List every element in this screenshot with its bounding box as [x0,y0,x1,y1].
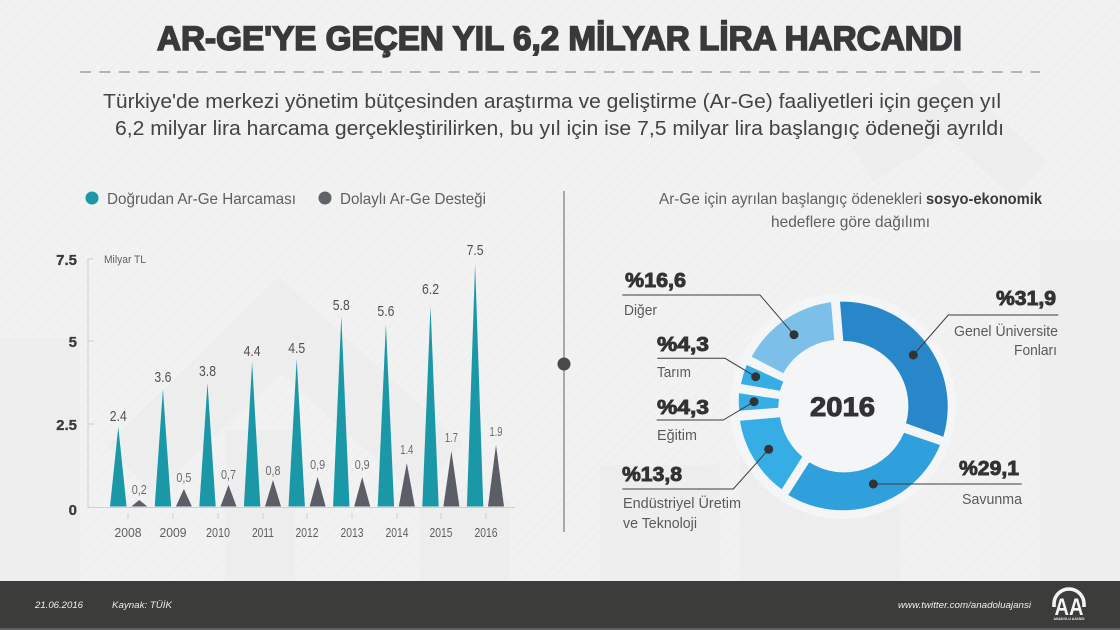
legend: Doğrudan Ar-Ge Harcaması [107,191,296,208]
callout: Endüstriyel Üretim ve Teknoloji: ve Teknoloji [623,515,697,532]
panel divider [558,191,570,532]
grey values: 0,8 [266,463,280,478]
grey triangles [131,445,504,506]
year labels: 2009 [160,525,186,540]
footer date: 21.06.2016 [34,600,84,611]
callout: Genel Üniversite Fonları: %31,9 [996,288,1056,310]
y axis labels: 0 [69,502,77,519]
segment: Savunma [788,433,940,510]
intro text [103,90,1004,140]
year labels: 2012 [296,525,318,540]
y axis labels: 2.5 [56,417,77,434]
callout: Diğer [622,270,798,339]
callout: Endüstriyel Üretim ve Teknoloji [622,445,773,532]
teal values: 2.4 [110,408,127,425]
legend [86,191,486,208]
year labels [114,525,498,540]
year labels: 2013 [340,525,364,540]
y axis labels: 7.5 [56,252,77,269]
teal values: 4.4 [244,343,261,360]
donut heading: Ar-Ge için ayrılan başlangıç ödenekleri [659,191,922,208]
grey values: 1.4 [400,442,413,457]
callout: Tarım: Tarım [657,364,691,381]
donut heading: sosyo-ekonomik [926,191,1042,208]
grey values: 0,2 [132,482,147,497]
teal values: 3.6 [154,369,171,386]
footer bar [0,581,1120,630]
center year: 2016 [810,392,875,422]
segment: Tarım [741,365,783,391]
icon: agency logo: AA [1054,594,1084,621]
y axis labels: Milyar TL [104,254,146,266]
teal values: 3.8 [199,363,216,380]
teal values: 4.5 [288,340,305,357]
grey values: 1.7 [445,430,458,445]
callout: Savunma: %29,1 [959,458,1019,480]
teal values [110,242,484,425]
callout: Endüstriyel Üretim ve Teknoloji: %13,8 [622,464,682,486]
intro text: 6,2 milyar lira harcama gerçekleştirilirken, bu yıl için ise 7,5 milyar lira başlangıç ödeneği ayrıldı [115,117,1004,140]
grey values: 1.9 [490,424,502,439]
year labels: 2015 [430,525,452,540]
callout: Diğer: %16,6 [625,270,686,292]
callout: Eğitim: Eğitim [657,427,697,444]
y axis labels [56,252,146,519]
segment: Diğer [752,302,834,373]
teal triangles [110,264,483,506]
segment: Endüstriyel Üretim ve Teknoloji [740,417,802,489]
title: AR-GE'YE GEÇEN YIL 6,2 MİLYAR LİRA HARCANDI [157,20,962,58]
callout: Endüstriyel Üretim ve Teknoloji: Endüstriyel Üretim [623,494,741,512]
callout: Savunma: Savunma [962,491,1023,508]
donut heading [659,191,1042,231]
teal values: 6.2 [422,281,439,298]
callout: Tarım [657,334,760,381]
teal values: 5.8 [333,297,350,314]
donut chart: 2016 distribution [730,293,956,519]
callout: Genel Üniversite Fonları: Fonları [1014,342,1057,359]
year labels: 2011 [252,525,274,540]
footer source: Kaynak: TÜİK [112,600,173,611]
footer link: www.twitter.com/anadoluajansi [898,600,1032,611]
grey values: 0,9 [355,457,370,472]
icon: agency logo: ANADOLU AJANSI [1054,617,1084,621]
teal values: 5.6 [377,303,394,320]
intro text: Türkiye'de merkezi yönetim bütçesinden araştırma ve geliştirme (Ar-Ge) faaliyetleri için geçen yıl [103,90,1001,113]
callout: Diğer: Diğer [624,302,657,319]
grey values: 0,7 [221,467,236,482]
callout: Eğitim [657,397,758,444]
chart axes [88,259,515,519]
year labels: 2016 [474,525,498,540]
teal values: 7.5 [467,242,484,259]
legend: Dolaylı Ar-Ge Desteği [340,191,486,208]
callout: Savunma [869,458,1023,508]
y axis labels: 5 [69,334,77,351]
year labels: 2014 [386,525,408,540]
year labels: 2008 [114,525,142,540]
callout: Genel Üniversite Fonları [909,288,1058,360]
bar chart: R&D spending [56,242,515,540]
callout: Eğitim: %4,3 [657,397,709,419]
callout: Genel Üniversite Fonları: Genel Üniversite [954,322,1058,340]
year labels: 2010 [206,525,230,540]
grey values [132,424,503,497]
segment: Genel Üniversite Fonları [840,302,948,437]
segment: Eğitim [739,393,779,411]
grey values: 0,9 [310,457,325,472]
grey values: 0,5 [176,470,191,485]
callout: Tarım: %4,3 [657,334,709,356]
donut heading: hedeflere göre dağılımı [771,214,930,231]
